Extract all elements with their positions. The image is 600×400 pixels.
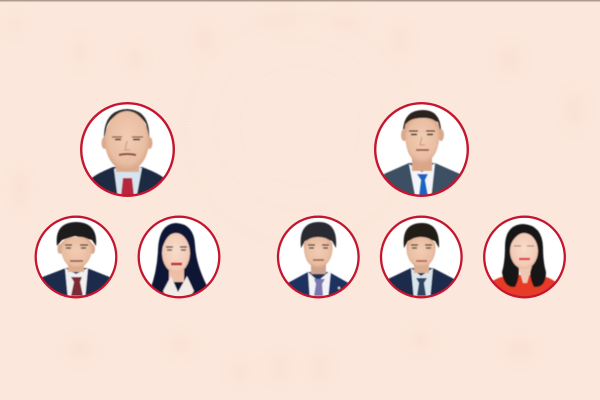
background pattern: fine concentric rings — [185, 15, 415, 245]
portrait 6: man with navy striped tie — [381, 217, 462, 300]
portrait 4: woman with long dark hair — [139, 217, 219, 300]
portrait 2: man with blue tie — [375, 103, 468, 200]
portrait 3: man with dark red tie — [36, 217, 116, 300]
portrait 5: man with lavender tie — [278, 217, 359, 300]
portrait 1: man with red tie — [81, 103, 174, 200]
portrait 7: woman in red dress — [484, 217, 565, 300]
